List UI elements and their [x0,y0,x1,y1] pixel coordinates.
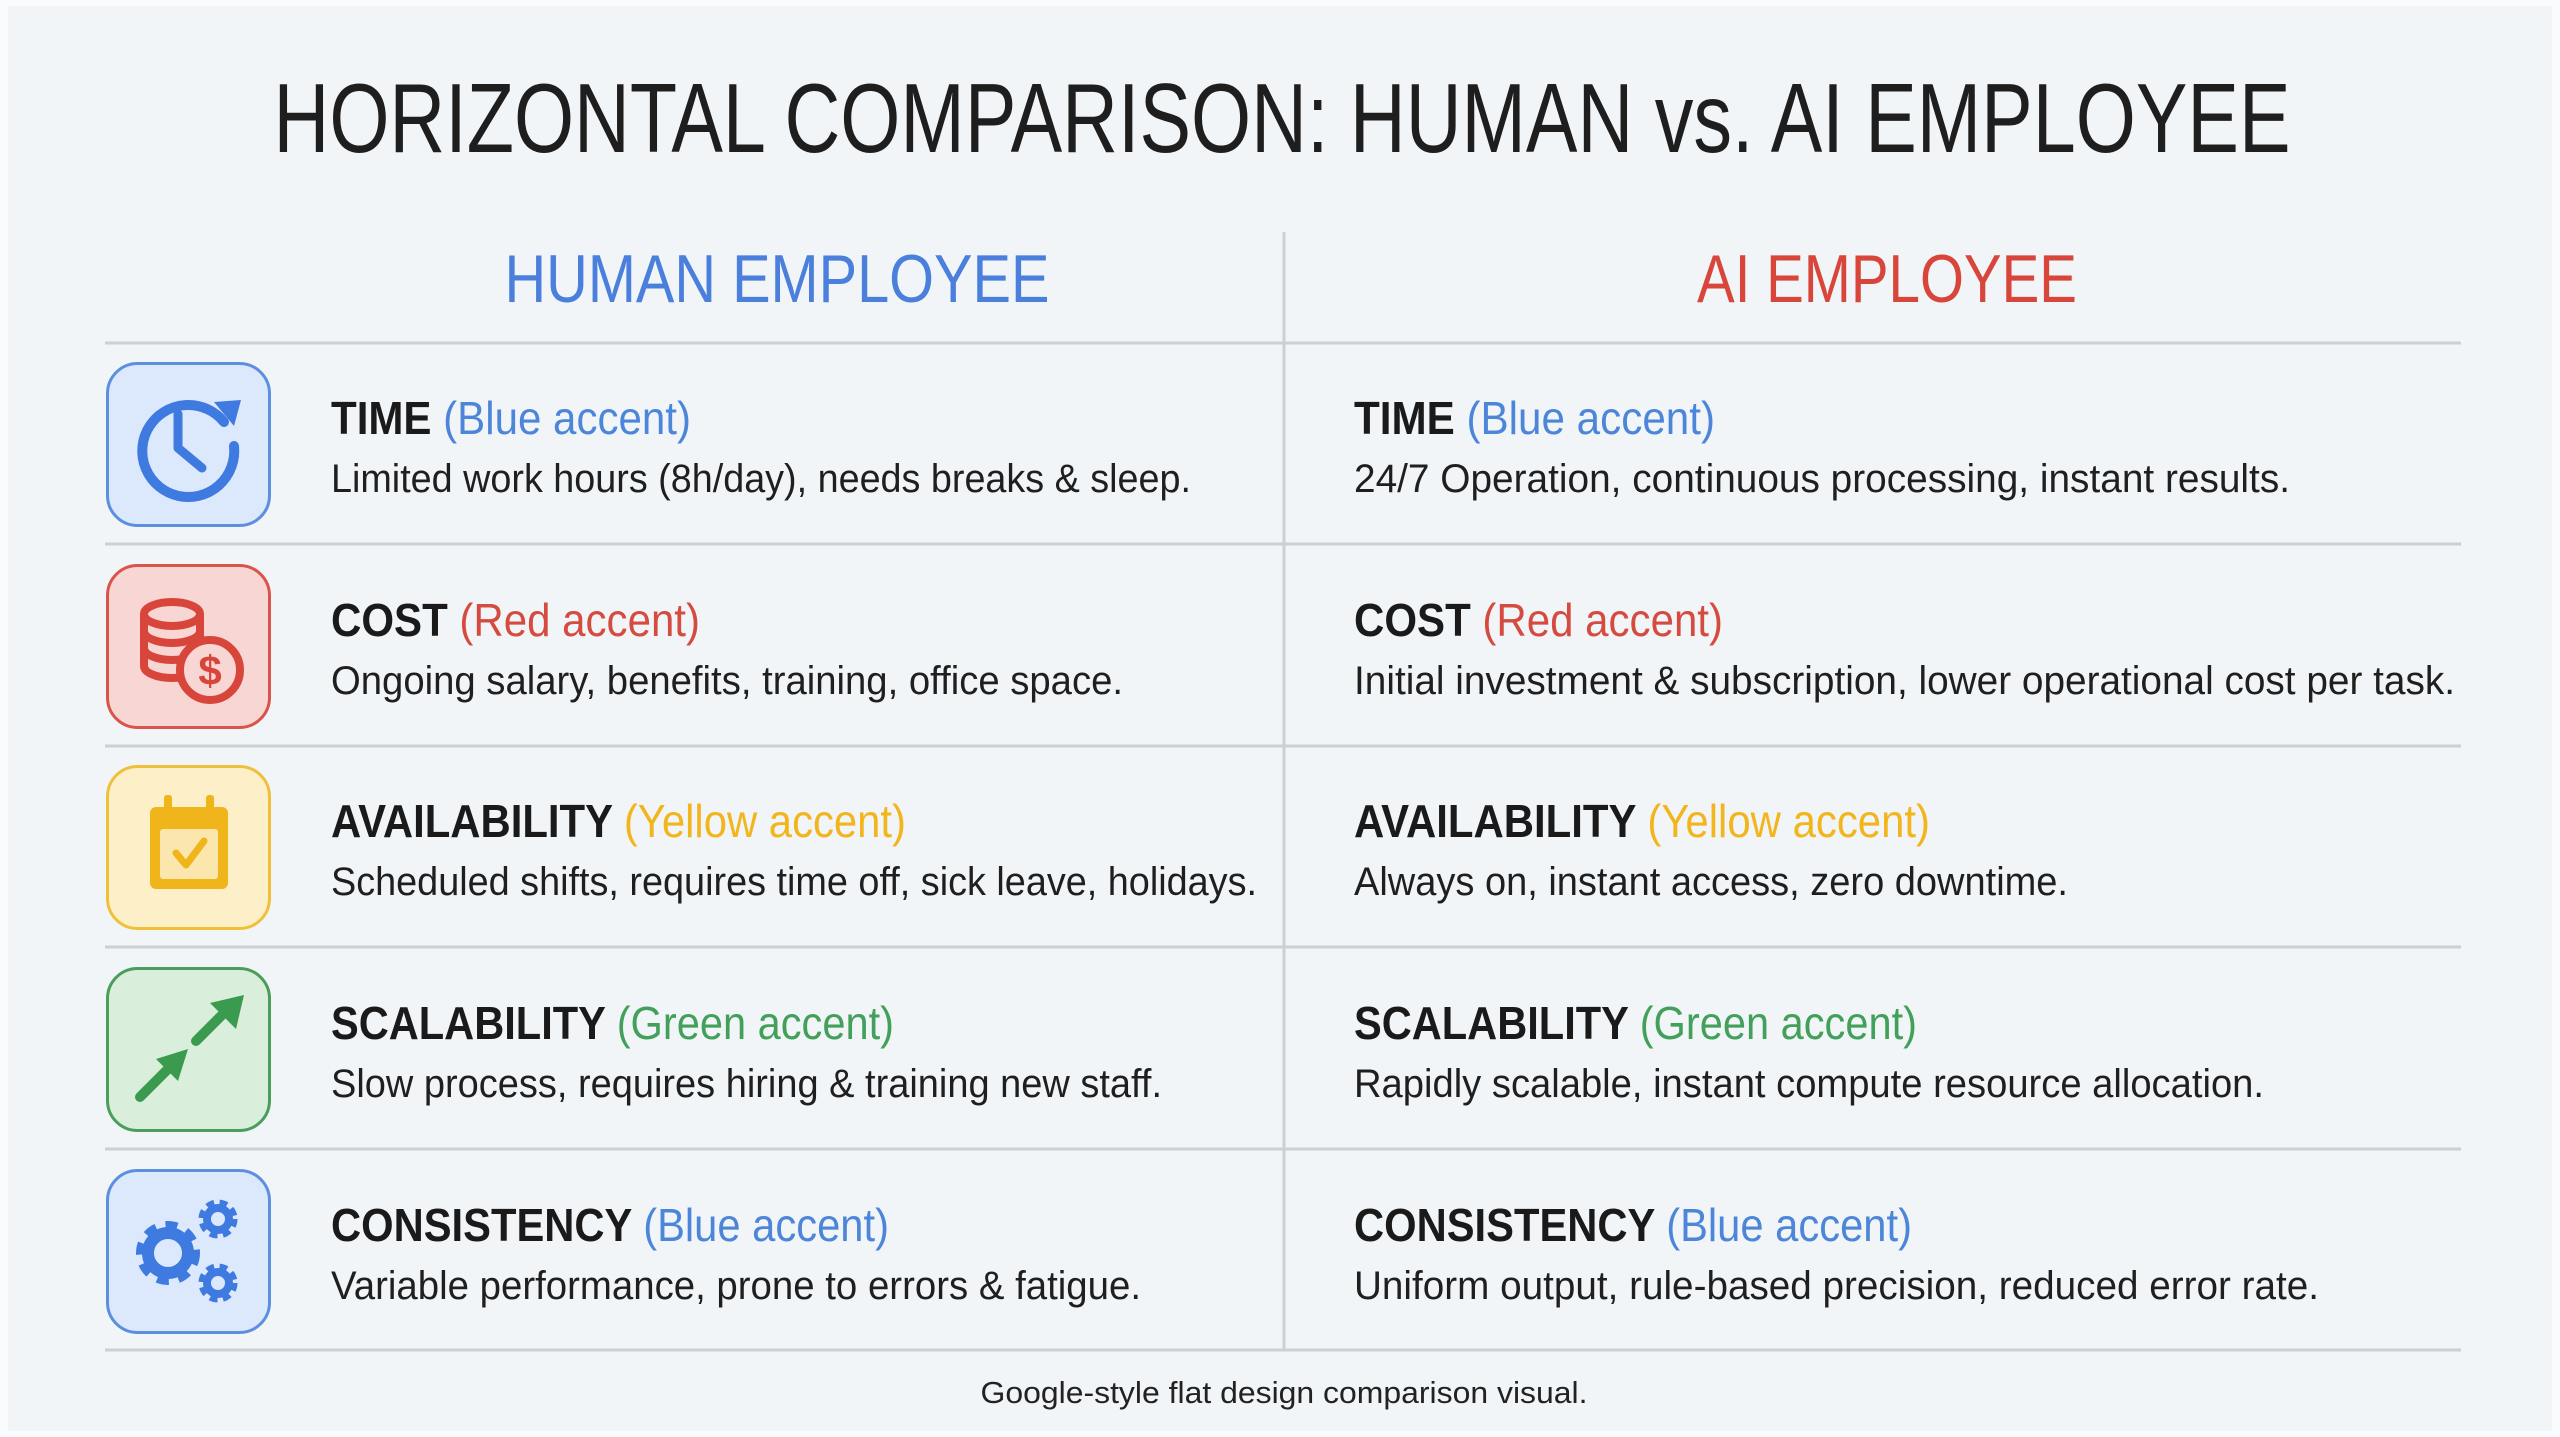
row 3 ai text [1354,795,2068,904]
row 5 human text [331,1199,1141,1308]
icon: gears [108,1170,270,1332]
row 4 human text: SCALABILITY (Green accent) [331,997,894,1049]
row 1 ai text [1354,392,2290,501]
row 2 ai text: Initial investment & subscription, lower operational cost per task. [1354,659,2455,703]
row 1 ai text: TIME (Blue accent) [1354,392,1715,444]
row 3 human text: AVAILABILITY (Yellow accent) [331,795,906,847]
row 5 human text: Variable performance, prone to errors & fatigue. [331,1264,1141,1308]
row 1 human text: TIME (Blue accent) [331,392,691,444]
row 4 ai text: Rapidly scalable, instant compute resource allocation. [1354,1062,2264,1106]
icon: calendar [108,766,270,928]
row 5 ai text: Uniform output, rule-based precision, reduced error rate. [1354,1264,2319,1308]
row 1 ai text: 24/7 Operation, continuous processing, instant results. [1354,457,2290,501]
row 2 human text [331,594,1123,703]
row 5 ai text [1354,1199,2319,1308]
icon: clock [108,364,270,526]
icon: scaling arrows [108,968,270,1130]
row 3 ai text: Always on, instant access, zero downtime. [1354,860,2068,904]
row 5 human text: CONSISTENCY (Blue accent) [331,1199,889,1251]
icon: coins: $ [198,647,222,694]
row 2 human text: COST (Red accent) [331,594,700,646]
row 4 ai text [1354,997,2264,1106]
row 3 ai text: AVAILABILITY (Yellow accent) [1354,795,1930,847]
column heading: human: HUMAN EMPLOYEE [504,241,1050,317]
row 3 human text: Scheduled shifts, requires time off, sick leave, holidays. [331,860,1257,904]
row 1 human text: Limited work hours (8h/day), needs breaks & sleep. [331,457,1191,501]
row 2 human text: Ongoing salary, benefits, training, office space. [331,659,1123,703]
row 2 ai text: COST (Red accent) [1354,594,1723,646]
row 1 human text [331,392,1191,501]
row 2 ai text [1354,594,2455,703]
footer caption: Google-style flat design comparison visual. [980,1375,1588,1410]
row 4 human text [331,997,1162,1106]
row 4 human text: Slow process, requires hiring & training new staff. [331,1062,1162,1106]
row 5 ai text: CONSISTENCY (Blue accent) [1354,1199,1912,1251]
column heading: ai: AI EMPLOYEE [1697,241,2077,317]
icon: coins [108,566,270,728]
row 3 human text [331,795,1257,904]
row 4 ai text: SCALABILITY (Green accent) [1354,997,1917,1049]
